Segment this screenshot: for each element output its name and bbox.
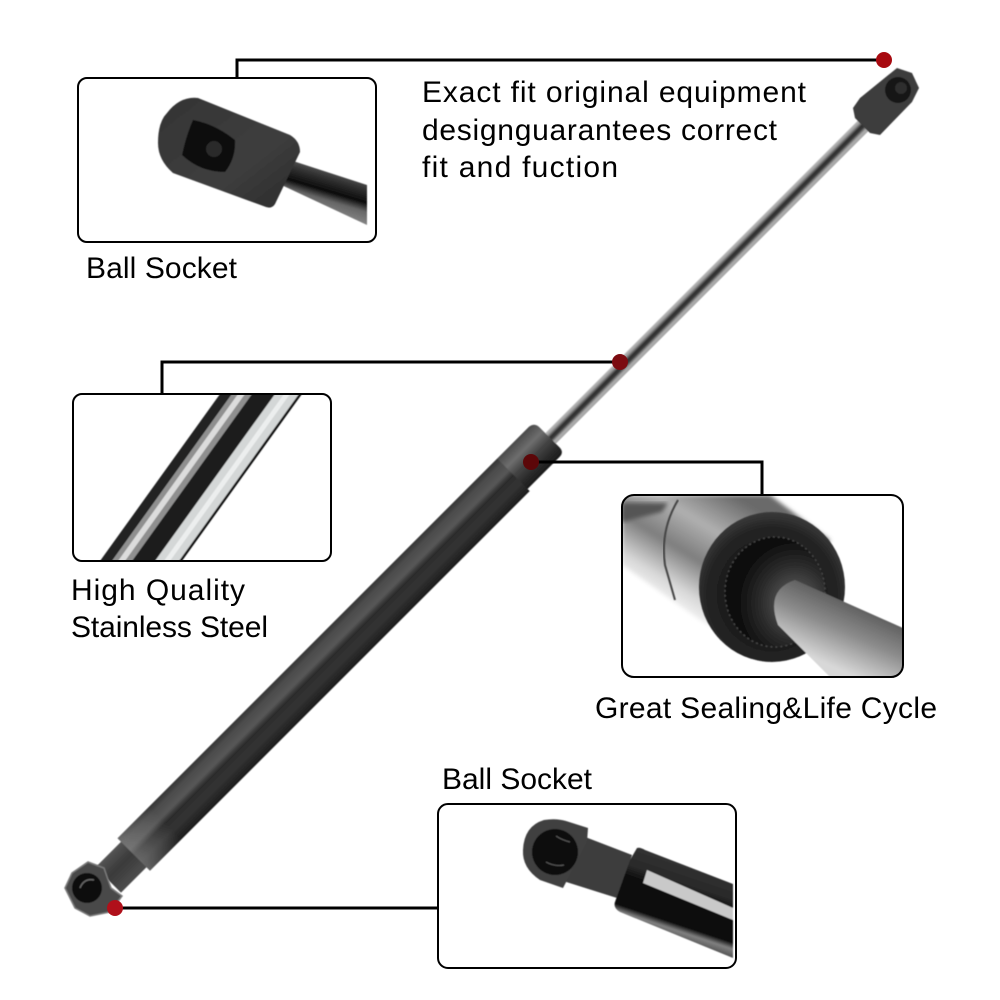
label: ball socket top: Ball Socket xyxy=(86,252,238,285)
leader line: seal xyxy=(531,462,762,495)
label: ball socket bottom: Ball Socket xyxy=(442,763,593,796)
panel: seal close-up xyxy=(622,495,903,677)
leader line: top socket xyxy=(237,60,884,78)
leader line: steel rod xyxy=(162,362,620,394)
description text: Exact fit original equipment xyxy=(422,76,807,109)
label: high quality stainless steel xyxy=(71,574,268,644)
strut body and rod xyxy=(92,100,888,896)
upper ball socket xyxy=(853,68,919,135)
marker dot: top socket xyxy=(876,52,892,68)
panel: stainless steel rod xyxy=(73,394,331,561)
marker dot: seal xyxy=(523,454,539,470)
main gas strut xyxy=(65,68,919,916)
description text: fit and fuction xyxy=(422,151,618,184)
label: high quality stainless steel: High Quality xyxy=(71,574,245,607)
leader line: bottom socket xyxy=(115,906,438,910)
panel: bottom ball socket xyxy=(438,804,736,968)
label: great sealing and life cycle: Great Sealing&Life Cycle xyxy=(595,692,937,725)
lower ball socket xyxy=(65,862,122,916)
panel: top ball socket xyxy=(78,78,376,242)
label: high quality stainless steel: Stainless Steel xyxy=(71,611,268,644)
description text xyxy=(422,76,807,184)
marker dot: steel rod xyxy=(612,354,628,370)
description text: designguarantees correct xyxy=(422,114,778,147)
marker dot: bottom socket xyxy=(107,900,123,916)
